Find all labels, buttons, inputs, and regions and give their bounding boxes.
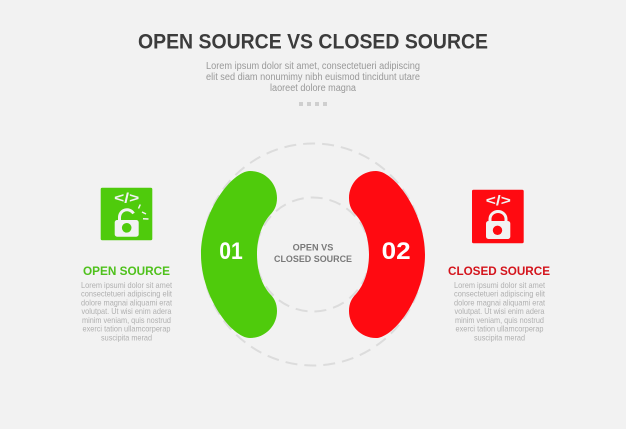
red segment 02 [349, 171, 425, 338]
intro text [206, 61, 420, 94]
center label [274, 242, 352, 264]
dashed outer ring [202, 144, 424, 366]
heading: closed source: CLOSED SOURCE [448, 264, 550, 278]
open source text: suscipita merad [101, 332, 152, 342]
open source text: consectetueri adipiscing elit [81, 289, 173, 299]
intro text: elit sed diam nonumimy nibh euismod tincidunt utare [206, 72, 420, 83]
green segment 01 [201, 171, 277, 338]
dashed inner ring [256, 198, 370, 312]
center label: OPEN VS [293, 242, 333, 252]
open source text: volutpat. Ut wisi enim adera [82, 306, 172, 316]
open source text: dolore magnai aliquami erat [81, 297, 173, 307]
heading: open source: OPEN SOURCE [83, 264, 170, 278]
center label: CLOSED SOURCE [274, 254, 352, 264]
open source text: exerci tation ullamcorperap [82, 324, 171, 334]
pagination dots [299, 102, 327, 106]
open source text [81, 280, 173, 342]
closed source text: dolore magnai aliquami erat [454, 297, 546, 307]
icon: open lock with code [101, 188, 152, 240]
icon: closed lock with code: </> [486, 192, 511, 208]
number 01: 01 [219, 238, 243, 265]
icon: closed lock with code [472, 190, 524, 243]
closed source text: Lorem ipsumi dolor sit amet [454, 280, 546, 290]
open source text: minim veniam, quis nostrud [82, 315, 171, 325]
closed source text: exerci tation ullamcorperap [456, 324, 544, 334]
intro text: Lorem ipsum dolor sit amet, consectetueri adipiscing [206, 61, 420, 72]
number 02: 02 [382, 238, 411, 265]
closed source text: volutpat. Ut wisi enim adera [454, 306, 545, 316]
title: OPEN SOURCE VS CLOSED SOURCE [138, 30, 488, 53]
closed source text: suscipita merad [474, 332, 525, 342]
open source text: Lorem ipsumi dolor sit amet [81, 280, 173, 290]
closed source text [454, 280, 546, 342]
closed source text: consectetueri adipiscing elit [454, 289, 546, 299]
icon: open lock with code: </> [114, 190, 139, 206]
intro text: laoreet dolore magna [270, 83, 356, 94]
closed source text: minim veniam, quis nostrud [455, 315, 544, 325]
